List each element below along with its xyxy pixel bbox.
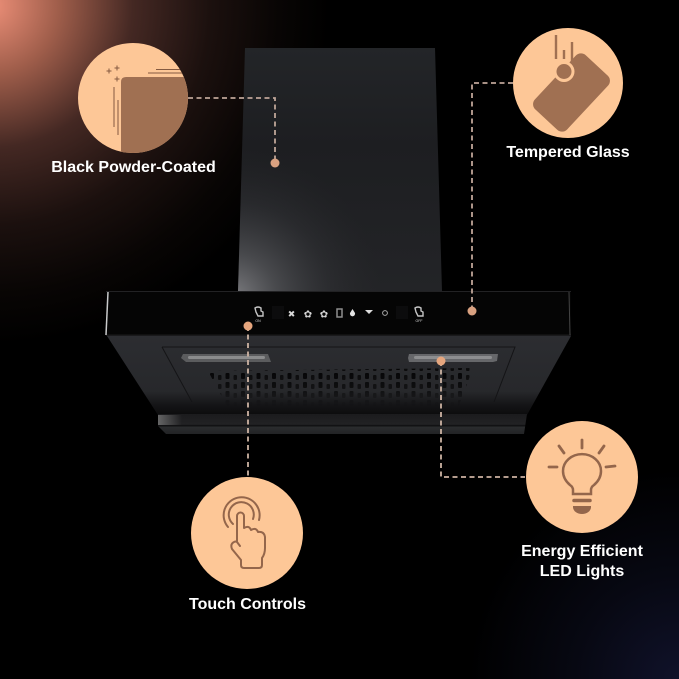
touch buttons: ✖: [288, 309, 295, 319]
touch buttons: ✿: [320, 310, 328, 320]
callout line: black powder-coated: [188, 98, 280, 168]
touch buttons: ON: [255, 319, 261, 323]
icon: powder coated corner: [78, 43, 190, 153]
label: energy efficient LED lights: [521, 543, 643, 580]
icon: touch hand: [191, 477, 303, 589]
glass control panel: [106, 291, 571, 336]
touch buttons: [255, 306, 423, 323]
callout line: touch controls: [244, 322, 252, 477]
label: tempered glass: Tempered Glass: [506, 144, 630, 161]
left LED light: [181, 354, 271, 362]
right LED light: [408, 354, 498, 362]
icon: light bulb: [526, 421, 638, 533]
icon: tempered glass: [513, 28, 623, 138]
touch buttons: ✿: [304, 310, 312, 320]
canopy underside: [107, 336, 571, 415]
label: energy efficient LED lights: Energy Efficient: [521, 543, 643, 560]
front lip: [158, 414, 527, 434]
label: black powder-coated: Black Powder-Coated: [51, 159, 216, 176]
label: touch controls: Touch Controls: [189, 596, 306, 613]
label: energy efficient LED lights: LED Lights: [540, 562, 624, 580]
range hood product: [106, 48, 571, 434]
touch buttons: OFF: [416, 319, 422, 323]
chimney: [238, 48, 442, 291]
callout line: LED lights: [436, 356, 525, 477]
callout line: tempered glass: [468, 83, 513, 316]
filter grille: [210, 368, 470, 398]
